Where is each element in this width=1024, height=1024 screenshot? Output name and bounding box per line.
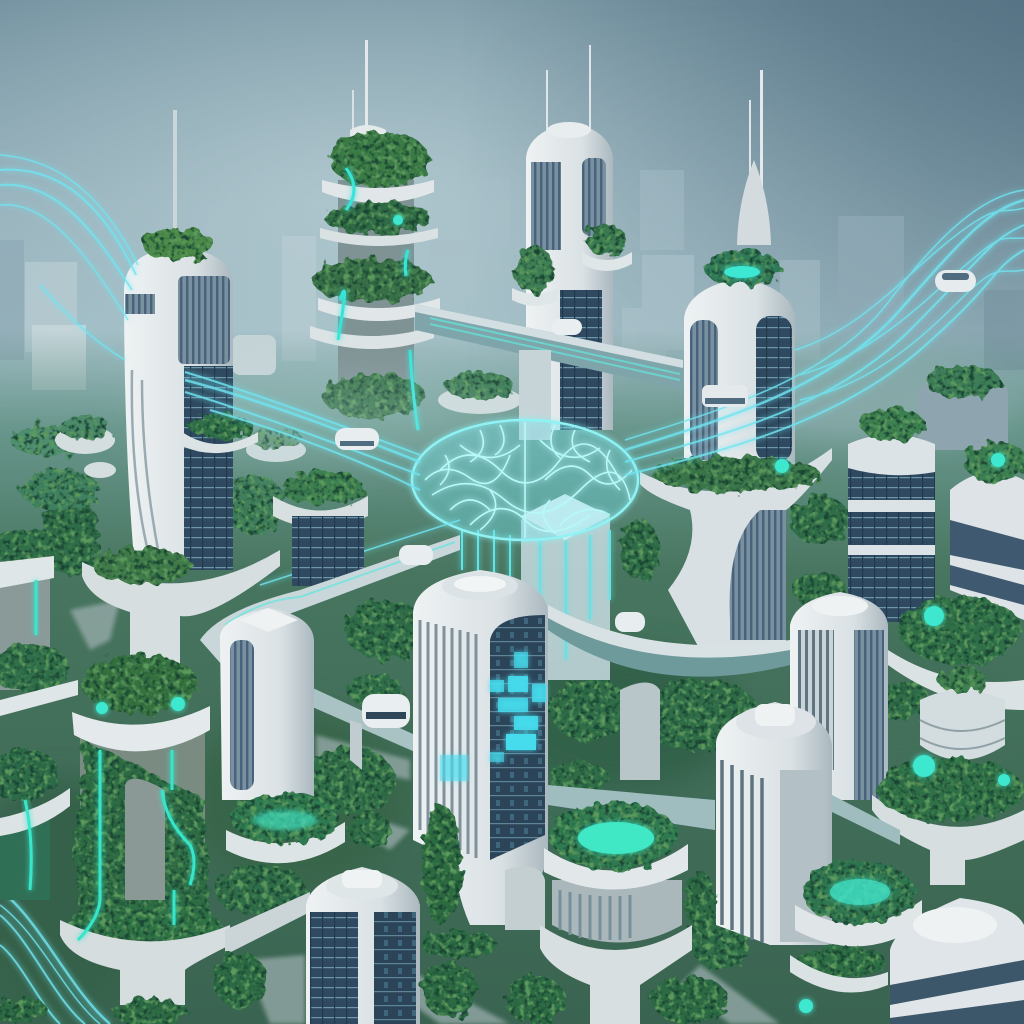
walkway from pillar tower bbox=[225, 892, 310, 955]
mini planter bbox=[226, 792, 345, 863]
data pixel display bbox=[440, 652, 546, 781]
platform: left tower bbox=[82, 550, 280, 670]
right planter platform bbox=[872, 755, 1024, 885]
central front tower bbox=[413, 570, 548, 930]
platform: right tower bbox=[640, 448, 832, 650]
small background garden pods bbox=[55, 335, 1008, 478]
vehicle: right tower pod bbox=[702, 385, 748, 407]
right garden terrace bbox=[888, 596, 1024, 710]
right upper towers bbox=[848, 408, 1024, 622]
distant buildings bbox=[0, 170, 1024, 390]
upper bridge bbox=[415, 304, 683, 440]
vehicle: left stream pod bbox=[335, 428, 379, 450]
glowing planter tower bbox=[540, 802, 692, 1024]
vehicle: bridge pod bbox=[551, 319, 582, 335]
foreground shrubs bbox=[0, 872, 728, 1024]
vehicle: upper right pod bbox=[935, 270, 976, 292]
tower E: bottom right corner bbox=[890, 898, 1024, 1024]
central translucent tower bbox=[462, 494, 610, 680]
rooftop garden: left tower bbox=[142, 228, 214, 260]
AI brain hologram bbox=[411, 420, 639, 540]
tower C: white ribbed bbox=[716, 702, 832, 945]
mid-left garden pods bbox=[273, 472, 368, 586]
ground shrubs bbox=[10, 424, 930, 970]
tower A: front left bbox=[220, 608, 314, 800]
background sky bbox=[0, 0, 1024, 407]
right lower planters bbox=[790, 860, 922, 1013]
back tower with antennae bbox=[512, 45, 632, 430]
tower B: right white bbox=[790, 592, 888, 800]
vehicle: lower bridge pods bbox=[362, 545, 645, 728]
mid garden: left tower bbox=[182, 432, 258, 453]
left main tower bbox=[82, 110, 280, 670]
curved lower bridge bbox=[200, 535, 790, 780]
bridge segment right bbox=[548, 785, 900, 845]
stacked pod tower bbox=[920, 667, 1005, 760]
garden pillar tower bbox=[60, 654, 310, 1005]
street network bbox=[70, 600, 780, 1024]
left edge planter tower bbox=[0, 528, 78, 900]
right main tower bbox=[640, 70, 832, 650]
planter: back tower bbox=[512, 224, 632, 306]
ground: gardens and streets bbox=[0, 330, 1024, 1024]
tower D: bottom centre-left bbox=[306, 867, 420, 1024]
vertical garden tower bbox=[310, 40, 440, 430]
bush beside central tower bbox=[422, 805, 462, 925]
fog behind foreground bbox=[140, 386, 520, 454]
